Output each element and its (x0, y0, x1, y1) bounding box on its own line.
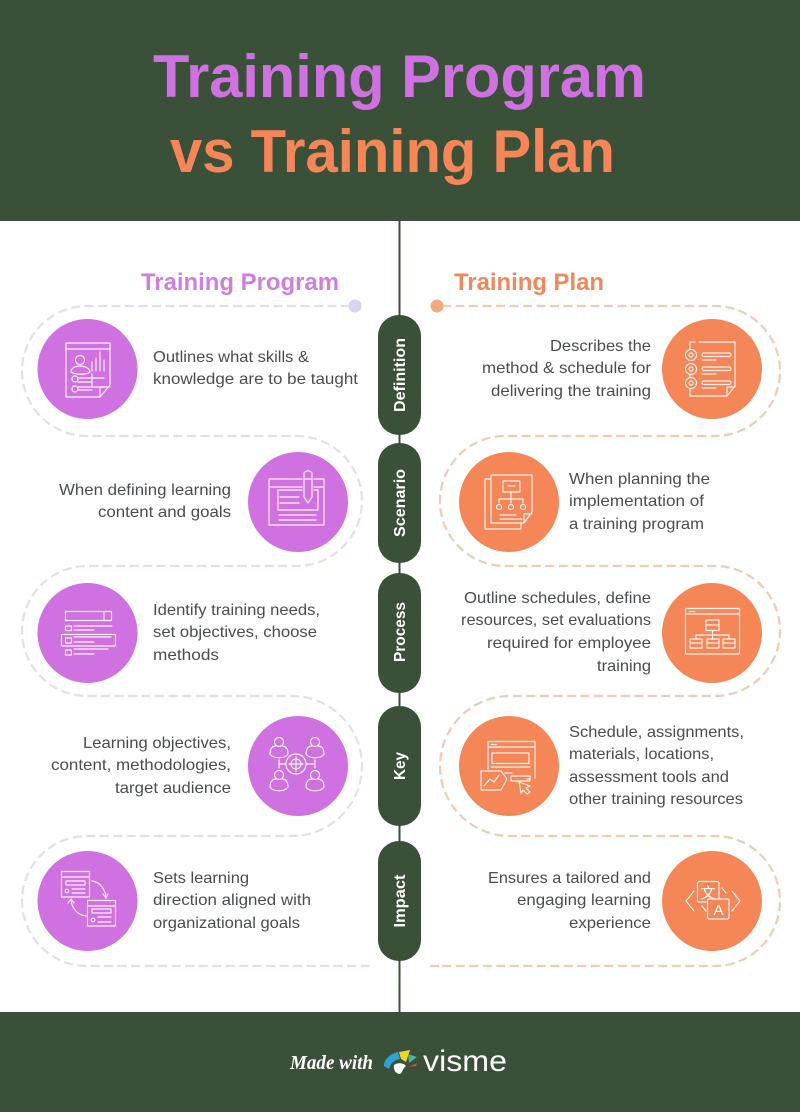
pill: Key: Key (392, 752, 409, 780)
text: program definition: Outlines what skills & (153, 349, 309, 366)
program impact row (38, 851, 311, 951)
pill: Definition: Definition (392, 338, 409, 412)
icon: profile document (66, 343, 110, 397)
plan process row (461, 583, 762, 683)
program process row (38, 583, 320, 683)
text: program definition: knowledge are to be taught (153, 371, 359, 388)
text: plan impact: engaging learning (517, 892, 651, 909)
plan key row (459, 716, 744, 816)
text: program scenario: When defining learning (59, 482, 231, 499)
pill: Impact: Impact (392, 874, 409, 928)
text: program process: Identify training needs, (153, 602, 320, 619)
pill: Process (378, 573, 421, 693)
visme wordmark: visme (423, 1045, 507, 1078)
text: program impact (153, 870, 311, 932)
text: plan definition: delivering the training (491, 383, 651, 400)
text: plan scenario: implementation of (569, 493, 705, 510)
text: program scenario: content and goals (98, 504, 231, 521)
text: plan scenario: When planning the (569, 471, 710, 488)
icon: swapping windows (62, 872, 116, 926)
text: program impact: organizational goals (153, 915, 300, 932)
text: plan process: Outline schedules, define (464, 590, 651, 607)
text: program key: Learning objectives, (83, 735, 231, 752)
made with label: Made with (289, 1052, 373, 1074)
text: program process: methods (153, 647, 219, 664)
pill: Key (378, 706, 421, 826)
text: program impact: Sets learning (153, 870, 249, 887)
text: program process (153, 602, 320, 664)
icon: translation: 文 (700, 885, 716, 902)
text: program key: target audience (115, 780, 231, 797)
text: plan impact: experience (569, 915, 651, 932)
text: plan scenario: a training program (569, 516, 704, 533)
text: plan definition (482, 338, 652, 400)
pill: Scenario: Scenario (392, 469, 409, 537)
text: program scenario (59, 482, 231, 521)
plan scenario row (459, 452, 710, 552)
heading: Training Plan: Training Plan (454, 269, 604, 296)
icon: translation: A (713, 902, 724, 919)
program key row (51, 716, 348, 816)
dashed connector: program side (22, 300, 373, 966)
icon: translation (686, 882, 740, 919)
plan definition row (482, 319, 762, 419)
text: program key (51, 735, 231, 797)
dashed connector: plan side (430, 300, 780, 966)
text: plan definition: Describes the (550, 338, 651, 355)
text: plan key (569, 724, 744, 808)
footer band (0, 1012, 800, 1112)
text: plan key: Schedule, assignments, (569, 724, 744, 741)
text: plan key: materials, locations, (569, 746, 714, 763)
text: plan definition: method & schedule for (482, 360, 652, 377)
plan impact row (488, 851, 762, 951)
text: plan process (461, 590, 651, 675)
program definition row (38, 319, 359, 419)
text: program process: set objectives, choose (153, 624, 317, 641)
icon: hierarchy document (485, 475, 532, 529)
header band (0, 0, 800, 221)
program scenario row (59, 452, 348, 552)
icon: pencil window (269, 471, 324, 525)
center timeline line (398, 221, 400, 1012)
text: plan impact (488, 870, 651, 932)
icon: org chart window (686, 608, 740, 654)
logo mark (384, 1050, 417, 1074)
text: plan key: other training resources (569, 791, 743, 808)
title: Training Program (153, 43, 646, 110)
icon: audience target (270, 738, 324, 791)
text: program definition (153, 349, 359, 388)
pill: Impact (378, 841, 421, 961)
pill: Process: Process (392, 602, 409, 662)
icon: analytics window (481, 742, 535, 794)
text: program key: content, methodologies, (51, 757, 231, 774)
text: plan key: assessment tools and (569, 769, 729, 786)
pill: Scenario (378, 443, 421, 563)
text: plan process: training (597, 658, 651, 675)
heading: Training Program: Training Program (141, 269, 339, 296)
pill: Definition (378, 315, 421, 435)
title: vs Training Plan (170, 118, 615, 185)
text: plan process: resources, set evaluations (461, 612, 651, 629)
text: program impact: direction aligned with (153, 892, 311, 909)
title (153, 43, 646, 185)
text: plan impact: Ensures a tailored and (488, 870, 651, 887)
text: plan process: required for employee (487, 635, 651, 652)
icon: checklist document (686, 342, 735, 396)
icon: list blocks (62, 612, 116, 655)
text: plan scenario (569, 471, 710, 533)
